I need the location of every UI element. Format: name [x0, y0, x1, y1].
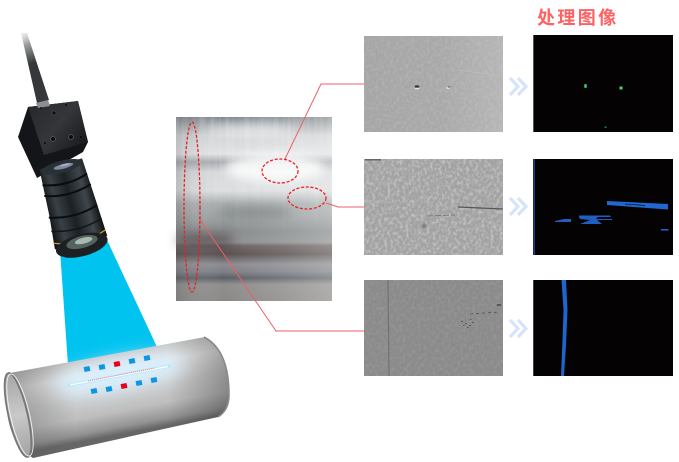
red dotted scan line	[88, 368, 155, 381]
processed image 3	[533, 280, 673, 376]
glow	[51, 348, 187, 402]
camera lens	[34, 154, 111, 263]
cylinder body	[7, 337, 229, 458]
defect circles	[184, 122, 326, 292]
source image 3	[364, 280, 503, 376]
connector lines	[199, 84, 364, 331]
arrow: row 3	[510, 320, 526, 337]
defect markers top row	[84, 355, 150, 372]
cap rim highlight	[1, 372, 39, 458]
processed image 2	[533, 159, 673, 255]
light beam	[60, 240, 157, 365]
camera body	[18, 100, 88, 178]
left cap	[0, 371, 37, 459]
cylinder end shading	[7, 337, 229, 458]
panel: metal surface photo	[175, 117, 332, 301]
processed image 1	[533, 35, 673, 132]
right rim	[204, 337, 229, 417]
arrow: row 2	[510, 198, 526, 215]
light line	[68, 366, 170, 386]
heading: processed image: 处理图像	[537, 8, 619, 28]
light line core	[70, 366, 168, 385]
defect markers bottom row	[91, 377, 157, 394]
icon: industrial camera	[18, 33, 111, 263]
arrow: row 1	[510, 78, 526, 95]
source image 2	[364, 159, 503, 255]
source image 1	[364, 36, 503, 132]
inspected cylinder	[0, 337, 229, 459]
camera cable	[21, 33, 49, 103]
